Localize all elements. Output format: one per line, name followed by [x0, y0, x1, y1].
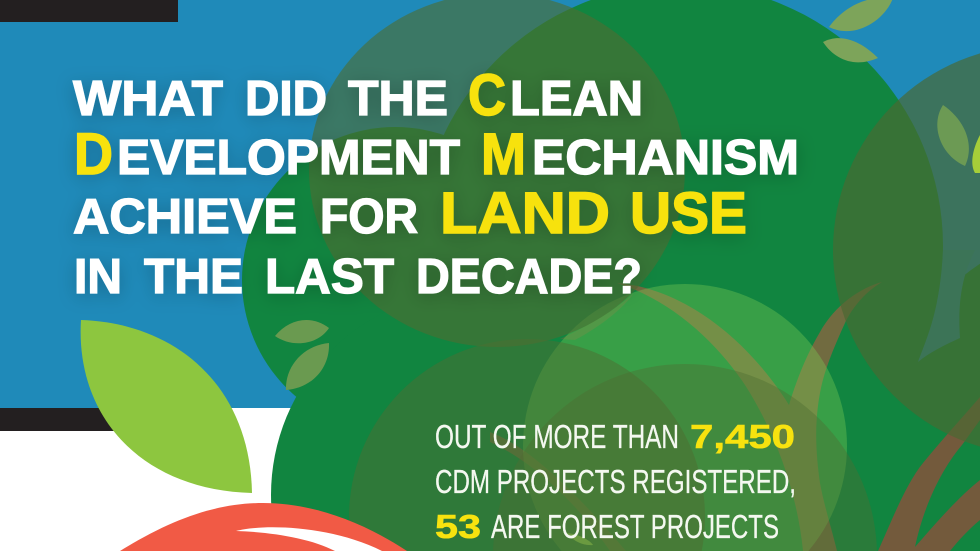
olive canopy circle: lower left	[349, 339, 705, 551]
olive canopy circle: lower middle	[493, 364, 877, 551]
title	[73, 63, 799, 304]
title: LEAN	[510, 72, 643, 126]
tree canopy: green circles	[242, 0, 980, 551]
leaf pair: top right	[823, 0, 893, 62]
large green apple leaf	[81, 320, 252, 493]
title: EVELOPMENT	[117, 131, 460, 185]
background: blue sky	[0, 0, 980, 408]
title: IN	[74, 250, 122, 304]
title: D	[74, 122, 113, 187]
title: USE	[630, 181, 747, 246]
title: LAND	[440, 181, 610, 246]
light canopy circle	[523, 284, 847, 551]
title: DID	[245, 72, 327, 126]
faint low leaf	[567, 533, 593, 545]
title: WHAT	[73, 72, 223, 126]
title: THE	[348, 72, 448, 126]
title: ECHANISM	[532, 131, 799, 185]
top black bar	[0, 0, 178, 22]
leaves on the canopy	[275, 0, 980, 545]
tree branches	[490, 282, 980, 551]
red apple	[120, 503, 407, 551]
title: ACHIEVE	[73, 190, 297, 244]
title: THE	[144, 250, 243, 304]
title: DECADE?	[416, 250, 642, 304]
leaf pair: left of canopy	[275, 320, 329, 390]
statistic text: 7,450	[690, 418, 795, 455]
lower black bar	[0, 408, 125, 431]
translucent canopy circle: top	[309, 0, 685, 347]
title: LAST	[265, 250, 394, 304]
translucent canopy circle: right	[833, 45, 980, 455]
teal sky gap in right canopy	[918, 250, 975, 362]
leaf pair: right edge	[937, 105, 980, 173]
title: C	[468, 63, 506, 128]
apple highlight	[236, 527, 382, 551]
statistic text: 53	[435, 508, 481, 545]
statistic text: ARE FOREST PROJECTS	[491, 508, 779, 545]
statistic text	[435, 418, 796, 545]
title: FOR	[320, 190, 418, 244]
title: M	[481, 122, 526, 187]
statistic text: CDM PROJECTS REGISTERED,	[435, 463, 796, 500]
statistic text: OUT OF MORE THAN	[435, 418, 679, 455]
